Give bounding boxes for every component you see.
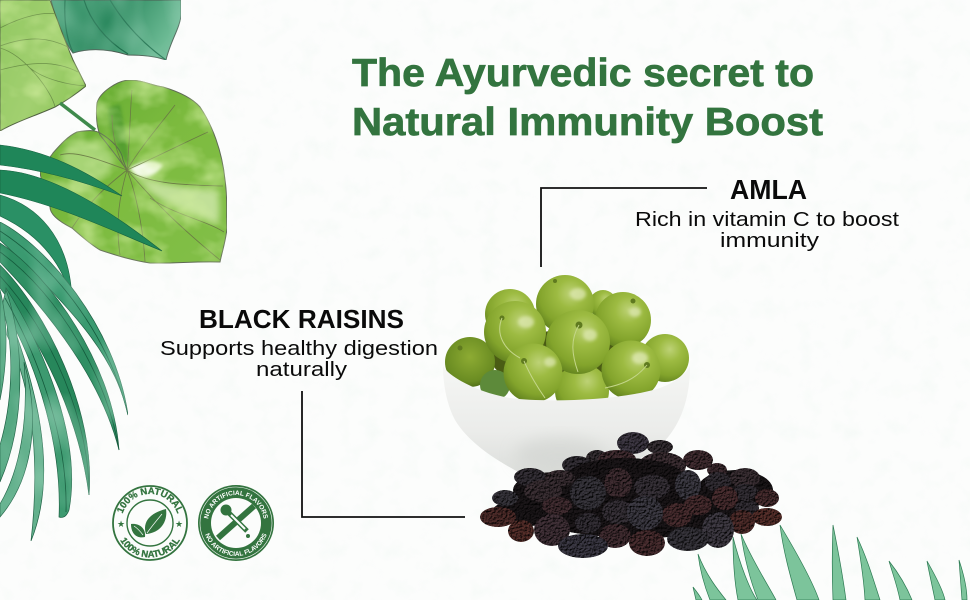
callout: black raisins: naturally bbox=[256, 358, 348, 381]
frond strips bbox=[0, 222, 128, 415]
callout: black raisins bbox=[160, 304, 438, 381]
badge: 100% natural: 100% NATURAL bbox=[120, 538, 180, 558]
title: The Ayurvedic secret to bbox=[352, 52, 814, 95]
frond midribs bbox=[0, 231, 128, 512]
callout: black raisins: BLACK RAISINS bbox=[199, 304, 404, 334]
callout: amla bbox=[635, 174, 899, 252]
palm fronds: upper blades bbox=[0, 145, 162, 300]
callout: amla: immunity bbox=[720, 229, 820, 252]
leaf: teal top bbox=[51, 0, 181, 60]
bowl bbox=[443, 366, 690, 474]
palm fronds: bottom right bbox=[693, 525, 967, 600]
leaf: large round green bbox=[40, 80, 227, 263]
badge: 100% natural: ★ bbox=[117, 519, 125, 529]
icon: leaves bbox=[131, 509, 166, 537]
amla fruits bbox=[445, 275, 689, 418]
title bbox=[352, 52, 823, 144]
leaves: top left foliage bbox=[0, 0, 181, 131]
connector: amla bbox=[541, 188, 707, 267]
callout: amla: Rich in vitamin C to boost bbox=[635, 208, 899, 231]
amla bowl bbox=[443, 275, 690, 474]
leaf stem bbox=[60, 103, 95, 130]
callout: amla: AMLA bbox=[730, 174, 807, 205]
badge: no artificial flavors bbox=[198, 485, 274, 561]
badge: no artificial flavors: NO ARTIFICIAL FLAVORS bbox=[204, 490, 268, 519]
title: Natural Immunity Boost bbox=[352, 101, 823, 144]
leaf: light green left bbox=[0, 0, 86, 131]
icon: crossed dropper bbox=[218, 504, 254, 538]
badge: no artificial flavors: NO ARTIFICIAL FLAVORS bbox=[205, 533, 266, 556]
fruit highlights bbox=[518, 288, 648, 367]
badge: 100% natural bbox=[112, 485, 188, 561]
palm fronds: lower left bbox=[0, 222, 128, 541]
callout: black raisins: Supports healthy digestion bbox=[160, 337, 438, 360]
connector: raisins bbox=[302, 391, 465, 517]
fruit details bbox=[458, 279, 650, 368]
badge: 100% natural: 100% NATURAL bbox=[117, 487, 182, 514]
raisins pile bbox=[480, 432, 782, 558]
badge: 100% natural: ★ bbox=[175, 519, 183, 529]
